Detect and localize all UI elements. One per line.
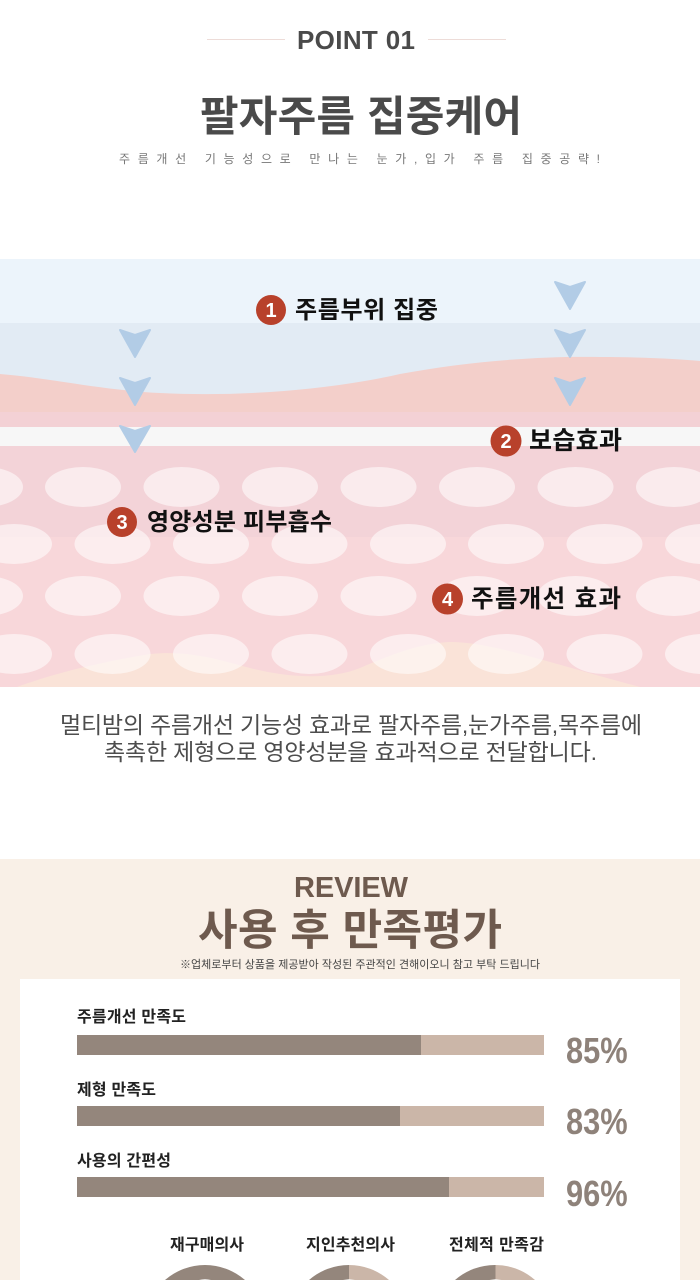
- donut: 재구매의사: [165, 1236, 245, 1280]
- label 1: 주름부위 집중: [295, 297, 438, 324]
- review heading: REVIEW: [294, 872, 409, 904]
- label 2: [490, 426, 622, 456]
- description text: 촉촉한 제형으로 영양성분을 효과적으로 전달합니다.: [104, 739, 597, 765]
- label 2: 2: [500, 431, 512, 453]
- label 4: [432, 584, 621, 614]
- donut: 지인추천의사: 지인추천의사: [306, 1236, 395, 1254]
- bar: 사용의 간편성 96%: [77, 1152, 628, 1215]
- bar: 제형 만족도 83%: 83%: [566, 1103, 628, 1143]
- label 3: 영양성분 피부흡수: [147, 509, 332, 536]
- description text: 멀티밤의 주름개선 기능성 효과로 팔자주름,눈가주름,목주름에: [60, 712, 642, 738]
- donut: 지인추천의사: [306, 1236, 395, 1280]
- label 1: 1: [265, 300, 277, 322]
- description text: [60, 712, 642, 765]
- bar: 주름개선 만족도 85%: 85%: [566, 1032, 628, 1072]
- panel: skin diagram: [0, 259, 700, 687]
- label 4: 4: [442, 589, 454, 611]
- title: 팔자주름 집중케어: [200, 93, 522, 140]
- bar: 제형 만족도 83%: [77, 1081, 628, 1143]
- subtitle: 주름개선 기능성으로 만나는 눈가,입가 주름 집중공략!: [119, 152, 600, 166]
- label 4: 주름개선 효과: [471, 585, 621, 613]
- skin layers background: [0, 259, 700, 687]
- review disclaimer: ※업체로부터 상품을 제공받아 작성된 주관적인 견해이오니 참고 부탁 드립니다: [180, 957, 540, 971]
- bar: 주름개선 만족도 85%: [77, 1008, 628, 1072]
- bar: 주름개선 만족도 85%: 주름개선 만족도: [77, 1008, 186, 1026]
- bar: 사용의 간편성 96%: 사용의 간편성: [77, 1152, 171, 1170]
- donut: 전체적 만족감: [449, 1236, 544, 1280]
- icon: right down arrows: [555, 282, 585, 405]
- cell pattern: [0, 467, 700, 674]
- panel: review: [0, 859, 700, 1280]
- donut: 재구매의사: 재구매의사: [170, 1236, 244, 1254]
- review background: [0, 859, 700, 1280]
- heading: POINT 01: POINT 01: [297, 25, 415, 55]
- bar: 사용의 간편성 96%: 96%: [566, 1175, 628, 1215]
- review title: 사용 후 만족평가: [198, 907, 502, 955]
- white card: [20, 979, 680, 1280]
- donut: 전체적 만족감: 전체적 만족감: [449, 1236, 544, 1254]
- label 3: 3: [116, 512, 128, 534]
- bar: 제형 만족도 83%: 제형 만족도: [77, 1081, 156, 1099]
- label 2: 보습효과: [529, 427, 622, 455]
- icon: left down arrows: [120, 330, 150, 452]
